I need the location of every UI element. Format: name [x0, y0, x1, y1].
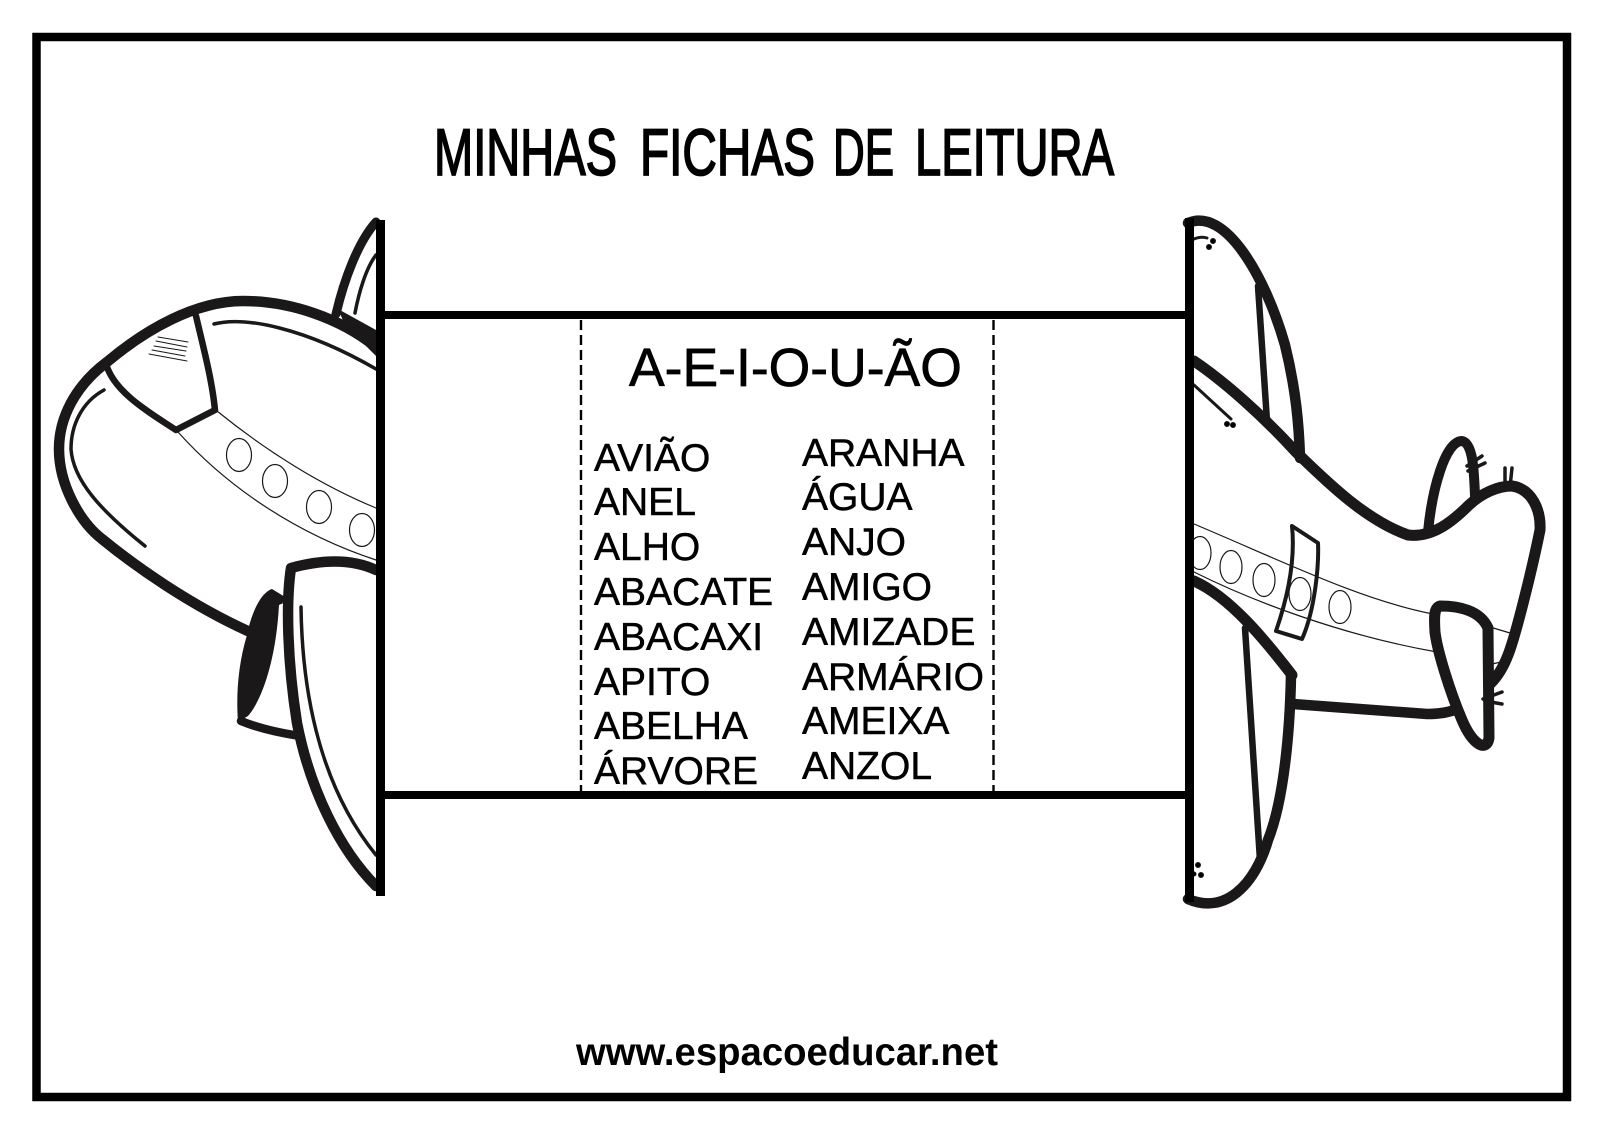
title: LEITURA — [915, 115, 1114, 189]
illustration: airplane nose, left half — [59, 222, 376, 886]
word list: right column: AMEIXA — [802, 700, 949, 743]
reading card frame — [376, 218, 1194, 902]
tail fin, lower — [1435, 606, 1502, 745]
lower fuselage and wing — [1188, 581, 1457, 903]
fuselage outline — [1194, 361, 1540, 683]
fold lines — [581, 320, 994, 791]
word list: right column: AMIZADE — [802, 611, 975, 654]
word list: left column: ABACAXI — [594, 616, 763, 659]
upper wing, right — [1188, 221, 1300, 458]
title: MINHAS — [434, 115, 617, 189]
word list: left column: AVIÃO — [594, 437, 710, 480]
door — [1276, 526, 1318, 639]
word list: left column: ÁRVORE — [594, 750, 758, 793]
word list: right column: ÁGUA — [802, 476, 913, 519]
word list: left column: ABELHA — [594, 705, 748, 748]
lower wing — [288, 562, 376, 886]
word list: right column — [802, 432, 984, 788]
word list: left column — [594, 437, 773, 793]
card heading: A-E-I-O-U-ÃO — [629, 339, 962, 398]
fuselage highlight — [1194, 385, 1236, 428]
title — [434, 115, 1114, 189]
engine — [237, 589, 300, 736]
cockpit window — [107, 316, 215, 430]
website footer: www.espacoeducar.net — [575, 1031, 998, 1074]
title: FICHAS — [640, 115, 815, 189]
window strip — [178, 411, 376, 560]
window strip — [1189, 524, 1510, 664]
word list: left column: APITO — [594, 661, 710, 704]
upper wing, left — [336, 222, 376, 356]
word list: right column: ANZOL — [802, 745, 932, 788]
word list: left column: ALHO — [594, 526, 700, 569]
tail fin, upper — [1428, 441, 1512, 532]
word list: right column: ARANHA — [802, 432, 965, 475]
word list: left column: ABACATE — [594, 571, 773, 614]
fuselage highlights — [71, 322, 376, 546]
word list: right column: AMIGO — [802, 566, 932, 609]
fuselage outline — [59, 301, 376, 632]
title: DE — [833, 115, 894, 189]
illustration: airplane tail, right half — [1188, 221, 1540, 903]
word list: left column: ANEL — [594, 481, 696, 524]
word list: right column: ANJO — [802, 521, 906, 564]
word list: right column: ARMÁRIO — [802, 656, 984, 699]
